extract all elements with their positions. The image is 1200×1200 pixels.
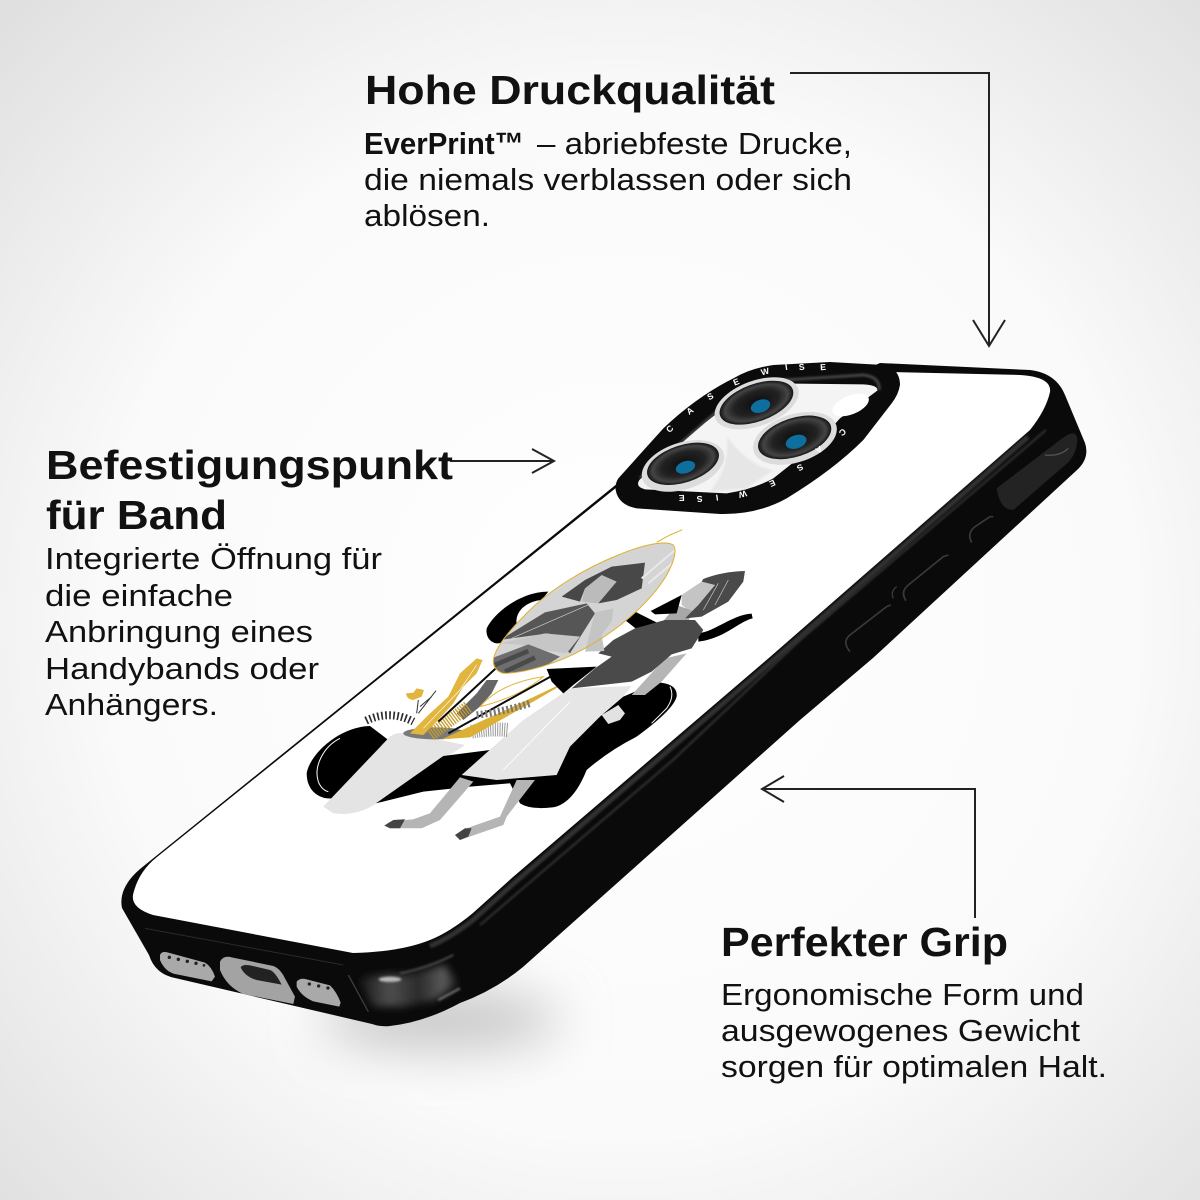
blue glass <box>784 432 808 451</box>
text block: attachment point <box>45 442 453 722</box>
arm <box>632 653 687 695</box>
flower stem and dark leaves <box>417 691 436 713</box>
upper figure and mirror <box>486 530 753 695</box>
phone case <box>121 362 1086 1026</box>
description: Handybands oder <box>45 651 319 686</box>
description: Anbringung eines <box>45 614 313 649</box>
description <box>364 126 852 233</box>
lower figure <box>307 682 677 840</box>
port opening <box>241 965 282 985</box>
grip patch <box>997 433 1077 510</box>
description: ausgewogenes Gewicht <box>721 1013 1080 1048</box>
brand ring text: I <box>715 493 719 503</box>
black loop <box>486 592 548 643</box>
tail <box>698 614 753 642</box>
brand ring text: C <box>836 426 848 439</box>
side rail ridge <box>480 430 1046 925</box>
right sandal <box>455 828 472 840</box>
white back panel <box>133 372 1050 953</box>
blue glass <box>749 397 772 416</box>
left leg <box>384 777 473 828</box>
description: Anhängers. <box>45 687 218 722</box>
bump frame <box>616 362 900 514</box>
bottom ports <box>145 928 343 1007</box>
yellow outline leaf <box>480 677 543 707</box>
lens left <box>635 431 731 501</box>
black band behind <box>625 610 662 633</box>
inner ledge <box>892 587 897 598</box>
yellow frond <box>442 677 575 739</box>
bottom ridge <box>145 928 343 965</box>
camera bump <box>616 362 900 514</box>
pot <box>403 727 467 739</box>
reflected skirt stripes <box>495 651 535 672</box>
bump inner clear window <box>638 383 877 493</box>
charging port <box>220 957 295 1004</box>
description: Ergonomische Form und <box>721 977 1084 1012</box>
brand ring text: S <box>696 494 703 504</box>
blue glass <box>674 458 697 476</box>
highlight spot <box>379 977 401 982</box>
text block: print quality <box>364 67 852 233</box>
description: ablösen. <box>364 198 490 233</box>
reflected face <box>582 575 617 603</box>
glass light streak <box>642 550 678 583</box>
grey sheen <box>360 965 458 1007</box>
shirt <box>572 620 703 688</box>
bump inner lip <box>640 375 879 478</box>
black fronds <box>438 666 552 733</box>
right speaker <box>297 979 341 1007</box>
volume up <box>903 555 948 601</box>
reflected skirt dark <box>492 644 560 675</box>
heading: Befestigungspunkt <box>46 442 453 488</box>
description: Integrierte Öffnung für <box>45 541 382 576</box>
heading: Perfekter Grip <box>721 919 1008 965</box>
brand ring text: W <box>760 365 771 377</box>
right leg <box>455 780 535 840</box>
pale fern <box>472 729 508 732</box>
description: – abriebfeste Drucke, <box>537 126 852 161</box>
yellow flower <box>406 688 424 700</box>
arrow: top <box>790 73 1005 346</box>
heading: Hohe Druckqualität <box>365 67 775 113</box>
reflected pale arm <box>500 633 580 653</box>
arrow: left <box>450 449 554 473</box>
crease <box>348 975 368 1012</box>
black sleeve <box>547 667 597 693</box>
brand ring text: A <box>813 444 824 456</box>
description: EverPrint™ <box>364 126 524 161</box>
brand ring text: W <box>737 488 748 500</box>
woman hair <box>685 571 745 618</box>
description: sorgen für optimalen Halt. <box>721 1049 1107 1084</box>
mirror hook <box>657 530 682 542</box>
hand <box>602 705 625 724</box>
reflected hair <box>562 563 645 603</box>
brand ring text: E <box>678 493 685 503</box>
black blob highlight <box>652 687 672 723</box>
brand ring text: S <box>795 462 805 473</box>
grey plant <box>457 680 498 720</box>
arrow: bottom <box>762 776 975 918</box>
hair strands <box>703 580 728 610</box>
right speaker dots <box>308 982 330 990</box>
mirror frame <box>493 543 675 673</box>
brand ring text: E <box>767 478 777 489</box>
leaf vein <box>423 665 477 728</box>
skirt fold <box>503 702 570 770</box>
description: die niemals verblassen oder sich <box>364 162 852 197</box>
woman neck <box>663 605 693 621</box>
dark fern <box>366 715 413 722</box>
description <box>45 541 382 722</box>
flash <box>829 389 872 421</box>
arrowhead <box>973 320 1005 346</box>
bottom corner reflection <box>348 955 460 1012</box>
grip crease <box>1045 448 1068 455</box>
left sandal <box>384 819 405 828</box>
black mass <box>376 682 677 808</box>
grey fern <box>477 703 530 715</box>
woman face <box>682 582 715 612</box>
mirror glass <box>493 543 675 673</box>
lens top <box>708 367 806 440</box>
side buttons and grip <box>846 433 1077 652</box>
brand ring text: E <box>732 376 741 388</box>
illustration: two women and mirror <box>307 530 753 840</box>
black hair <box>651 595 682 614</box>
window shading <box>710 437 773 492</box>
description: die einfache <box>45 578 233 613</box>
light shape <box>323 733 465 814</box>
text block: perfect grip <box>721 919 1107 1084</box>
left speaker <box>160 952 215 981</box>
mirror reflection <box>492 550 678 675</box>
edge gloss band <box>430 437 1028 946</box>
skirt <box>462 686 632 780</box>
reflected body <box>500 603 595 653</box>
brand ring text: S <box>705 390 715 402</box>
brand ring text: A <box>684 405 696 417</box>
arrowhead <box>762 776 784 802</box>
description <box>721 977 1107 1084</box>
silent switch <box>970 517 993 543</box>
plants <box>366 658 575 739</box>
yellow leaf <box>410 658 483 735</box>
brand ring text: E <box>820 362 827 372</box>
upper gloss <box>400 955 453 973</box>
brand ring text: C <box>664 422 676 435</box>
oval highlight <box>317 738 340 792</box>
case body <box>121 363 1086 1026</box>
phone shadow <box>320 992 560 1048</box>
heading <box>46 442 453 538</box>
brand ring text <box>664 362 848 504</box>
highlight line <box>438 988 460 1000</box>
reflected sleeve stripe <box>512 603 592 638</box>
heading: für Band <box>46 492 227 538</box>
brand ring text: S <box>798 362 805 372</box>
arrowhead <box>532 449 554 473</box>
brand ring text: I <box>784 362 788 372</box>
black blob left oval <box>307 726 388 799</box>
lens right <box>746 402 844 475</box>
volume down <box>846 605 891 652</box>
yellow fern <box>431 707 468 735</box>
reflected arm <box>585 608 613 652</box>
left speaker dots <box>168 956 205 967</box>
